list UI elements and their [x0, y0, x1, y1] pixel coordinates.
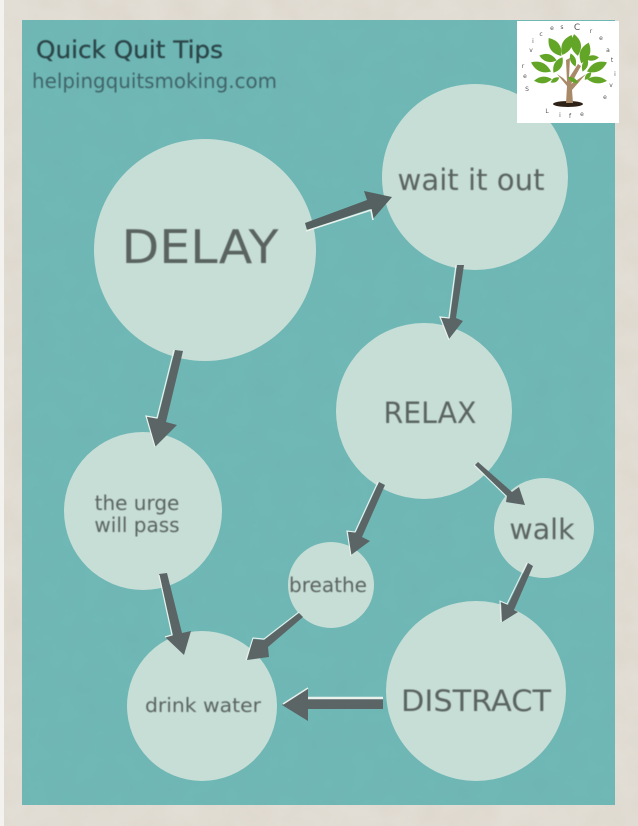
label: breathe: breathe	[289, 573, 367, 597]
text: circular logo letters: c	[539, 31, 543, 38]
circle: RELAX	[336, 323, 512, 499]
text: circular logo letters: e	[603, 94, 607, 101]
text: circular logo letters: i	[614, 71, 616, 78]
text: circular logo letters: S	[525, 86, 529, 93]
text: circular logo letters: v	[529, 47, 533, 54]
icon: tree	[529, 33, 609, 107]
text: circular logo letters: i	[559, 112, 561, 119]
text: circular logo letters: s	[560, 24, 564, 31]
arrow: wait it out to RELAX	[440, 265, 464, 340]
label: walk: walk	[509, 513, 575, 546]
text: circular logo letters: r	[522, 63, 525, 70]
label: RELAX: RELAX	[384, 396, 476, 430]
label: DELAY: DELAY	[122, 220, 279, 274]
arrow: RELAX to walk	[474, 462, 525, 505]
text: circular logo letters: f	[569, 113, 572, 120]
circle: DISTRACT	[386, 601, 566, 781]
arrow: the urge to drink water	[159, 573, 191, 655]
text: circular logo letters: a	[606, 47, 610, 54]
label: the urge will pass: the urge	[95, 491, 179, 515]
text: circular logo letters: t	[611, 57, 614, 64]
text: circular logo letters: C	[574, 23, 580, 33]
arrow: RELAX to breathe	[347, 482, 385, 556]
label: the urge will pass: will pass	[94, 513, 180, 537]
text: website: helpingquitsmoking.com	[32, 69, 277, 93]
circle: walk	[494, 478, 594, 578]
label: wait it out: wait it out	[398, 163, 544, 197]
label: DISTRACT: DISTRACT	[401, 684, 551, 718]
logo: tree badge	[517, 21, 619, 123]
text: circular logo letters: e	[599, 35, 603, 42]
arrow: DELAY to wait it out	[305, 191, 392, 231]
heading: Quick Quit Tips: Quick Quit Tips	[36, 36, 223, 64]
arrow: breathe to drink water	[246, 612, 303, 660]
text: circular logo letters	[522, 23, 616, 120]
text: circular logo letters: e	[580, 111, 584, 118]
text: circular logo letters: i	[532, 38, 534, 45]
arrow: DELAY to the urge	[146, 350, 183, 447]
circle: breathe	[288, 542, 374, 628]
arrow: DISTRACT to drink water	[282, 688, 383, 721]
text: circular logo letters: e	[523, 73, 527, 80]
text: circular logo letters: r	[590, 28, 593, 35]
circle: DELAY	[94, 139, 316, 361]
arrow: walk to DISTRACT	[500, 563, 533, 622]
text: circular logo letters: v	[609, 82, 613, 89]
circle: the urge will pass	[64, 432, 222, 590]
label: drink water: drink water	[145, 694, 262, 717]
circle: wait it out	[382, 84, 568, 270]
circle: drink water	[127, 631, 277, 781]
text: circular logo letters: e	[550, 25, 554, 32]
text: circular logo letters: L	[545, 108, 549, 115]
